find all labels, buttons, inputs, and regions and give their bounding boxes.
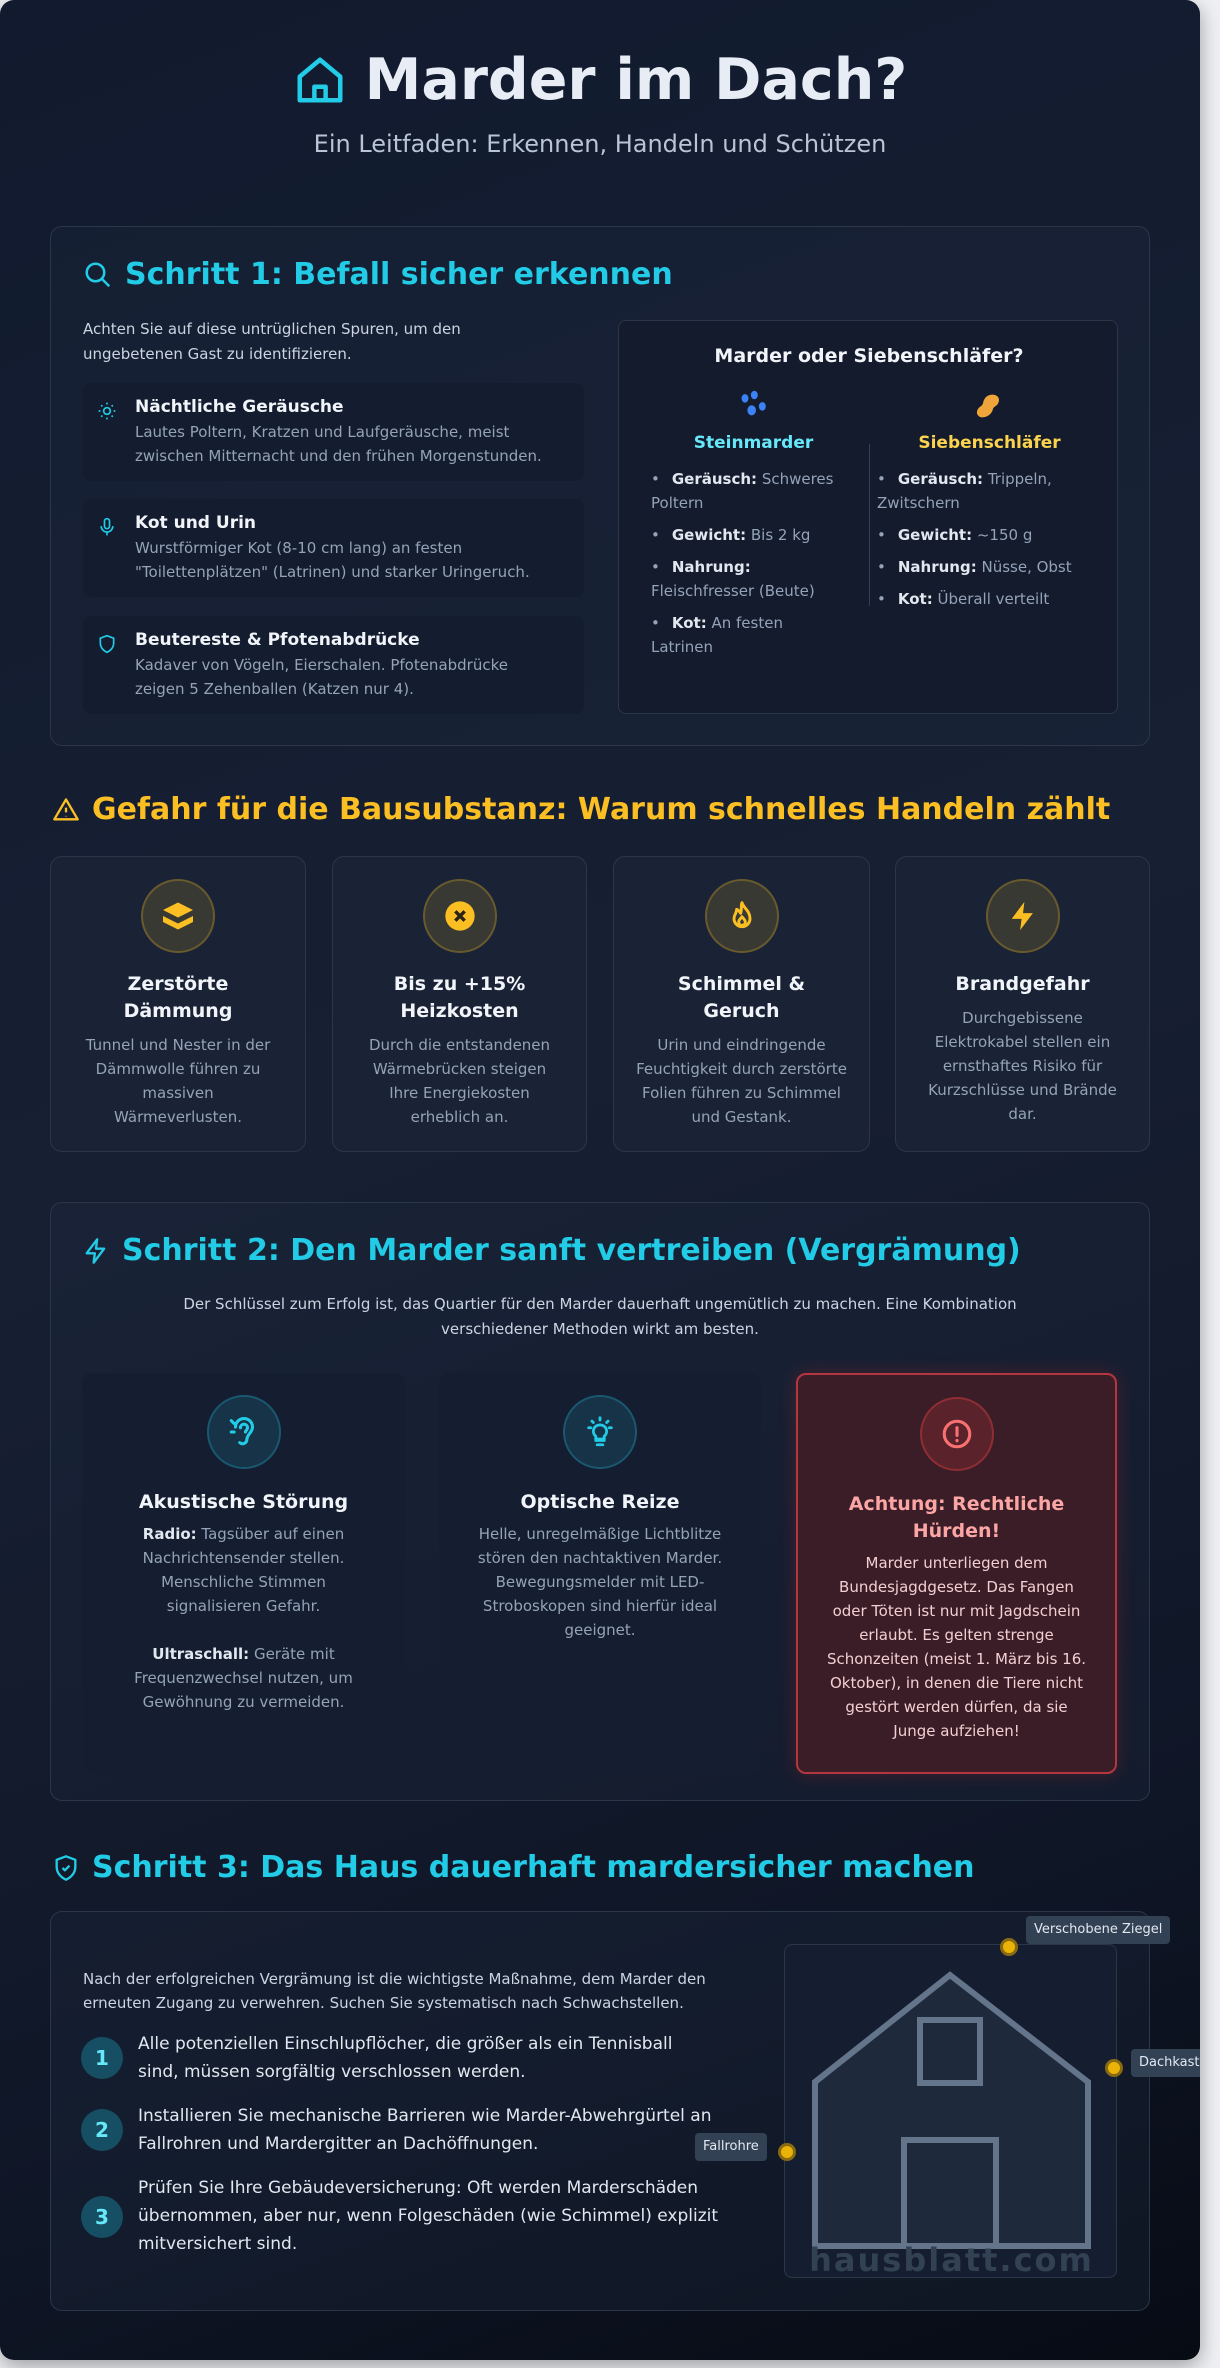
- header: [298, 47, 907, 158]
- heading step 3: Schritt 3: Das Haus dauerhaft mardersicher machen: [92, 1850, 975, 1885]
- callout: legal warning: Marder unterliegen dem Bundesjagdgesetz. Das Fangen oder Töten ist nur mit Jagdschein erlaubt. Es gelten strenge Schonzeiten (meist 1. März bis 16. Oktober), in denen die Tiere nicht gestört werden dürfen, da sie Junge aufziehen!: [827, 1554, 1086, 1740]
- card: Dämmung: Tunnel und Nester in der Dämmwolle führen zu massiven Wärmeverlusten.: [86, 1036, 270, 1126]
- method: optical: [439, 1373, 761, 1774]
- icon: peanut: [976, 394, 999, 418]
- marker: Dachkasten: [1105, 2049, 1200, 2077]
- panel: Schritt 2: [50, 1202, 1150, 1801]
- icon: flame: [704, 879, 778, 953]
- intro step 3: Nach der erfolgreichen Vergrämung ist die wichtigste Maßnahme, dem Marder den erneuten Zugang zu verwehren. Suchen Sie systematisch nach Schwachstellen.: [83, 1970, 706, 2012]
- sign: noises: Lautes Poltern, Kratzen und Laufgeräusche, meist zwischen Mitternacht und den frühen Morgenstunden.: [135, 423, 542, 465]
- marker: Verschobene Ziegel: [1000, 1916, 1170, 1956]
- step 2: Installieren Sie mechanische Barrieren wie Marder-Abwehrgürtel an Fallrohren und Mardergitter an Dachöffnungen.: [138, 2106, 712, 2154]
- callout: legal warning: Achtung: Rechtliche Hürden!: [849, 1493, 1064, 1542]
- method: optical: Optische Reize: [521, 1491, 679, 1513]
- title: Marder im Dach?: [365, 47, 907, 113]
- marker: Fallrohre: Fallrohre: [703, 2139, 759, 2154]
- card: Dämmung: [50, 856, 306, 1152]
- step 1: 1: [95, 2046, 109, 2070]
- sign: prey remains: Beutereste & Pfotenabdrücke: [135, 630, 420, 650]
- step 3: Prüfen Sie Ihre Gebäudeversicherung: Oft werden Marderschäden übernommen, aber nur, wenn Folgeschäden (wie Schimmel) explizit mitversichert sind.: [138, 2178, 718, 2254]
- marker: Verschobene Ziegel: Verschobene Ziegel: [1034, 1922, 1162, 1937]
- comparison box: Kot: Überall verteilt: [898, 590, 1049, 608]
- heading step 1: Schritt 1: Befall sicher erkennen: [125, 257, 673, 292]
- card: Dämmung: Zerstörte Dämmung: [124, 973, 232, 1022]
- icon: layers: [141, 879, 215, 953]
- callout: legal warning: [796, 1373, 1117, 1774]
- card: Brandgefahr: Brandgefahr: [955, 973, 1090, 995]
- sign: droppings: Kot und Urin: [135, 513, 256, 533]
- card: Schimmel: Schimmel & Geruch: [678, 973, 805, 1022]
- sign: droppings: [83, 499, 584, 597]
- card: Brandgefahr: [895, 856, 1150, 1152]
- card: Heizkosten: Bis zu +15% Heizkosten: [394, 973, 525, 1022]
- divider: [869, 444, 870, 606]
- sign: noises: Nächtliche Geräusche: [135, 397, 344, 417]
- step 2: 2: [95, 2118, 109, 2142]
- heading: Gefahr: Gefahr für die Bausubstanz: Warum schnelles Handeln zählt: [92, 792, 1110, 827]
- method: acoustic: [82, 1373, 405, 1774]
- card: Heizkosten: Durch die entstandenen Wärmebrücken steigen Ihre Energiekosten erheblich an.: [369, 1036, 550, 1126]
- comparison box: Kot: An festen Latrinen: [651, 614, 783, 656]
- comparison box: [618, 320, 1118, 714]
- column: Siebenschläfer: [877, 394, 1072, 608]
- icon: bulb: [563, 1395, 637, 1469]
- step 3: 3: [95, 2205, 109, 2229]
- icon: ear: [206, 1395, 280, 1469]
- sign: prey remains: Kadaver von Vögeln, Eierschalen. Pfotenabdrücke zeigen 5 Zehenballen (Katzen nur 4).: [135, 656, 508, 698]
- card: Brandgefahr: Durchgebissene Elektrokabel stellen ein ernsthaftes Risiko für Kurzschlüsse und Brände dar.: [928, 1009, 1117, 1123]
- icon: x circle: [422, 879, 496, 953]
- icon: paw: [742, 390, 766, 416]
- sign: droppings: Wurstförmiger Kot (8-10 cm lang) an festen "Toilettenplätzen" (Latrinen) und starker Uringeruch.: [135, 539, 530, 581]
- comparison box: Siebenschläfer: [918, 433, 1061, 453]
- panel: Schritt 1: [50, 226, 1150, 746]
- comparison box: Nahrung: Nüsse, Obst: [898, 558, 1072, 576]
- comparison box: Steinmarder: [694, 433, 813, 453]
- sign: noises: [83, 383, 584, 481]
- heading step 2: Schritt 2: Den Marder sanft vertreiben (Vergrämung): [122, 1233, 1021, 1268]
- marker: Fallrohre: [695, 2133, 796, 2161]
- subtitle: Ein Leitfaden: Erkennen, Handeln und Schützen: [314, 130, 886, 158]
- step 1: Alle potenziellen Einschlupflöcher, die größer als ein Tennisball sind, müssen sorgfältig verschlossen werden.: [138, 2034, 672, 2082]
- comparison box: Nahrung: Fleischfresser (Beute): [651, 558, 815, 600]
- comparison box: Geräusch: Trippeln, Zwitschern: [877, 470, 1052, 512]
- column: Steinmarder: [651, 390, 833, 656]
- sign: prey remains: [83, 616, 584, 714]
- card: Schimmel: Urin und eindringende Feuchtigkeit durch zerstörte Folien führen zu Schimmel und Gestank.: [636, 1036, 847, 1126]
- method: acoustic: Ultraschall: Geräte mit Frequenzwechsel nutzen, um Gewöhnung zu vermeiden.: [134, 1645, 353, 1711]
- icon: bolt: [986, 879, 1060, 953]
- card: Schimmel: [613, 856, 870, 1152]
- comparison box: Geräusch: Schweres Poltern: [651, 470, 833, 512]
- method: optical: Helle, unregelmäßige Lichtblitze stören den nachtaktiven Marder. Bewegungsmelder mit LED-Stroboskopen sind hierfür ideal geeignet.: [478, 1525, 722, 1639]
- intro text: Achten Sie auf diese untrüglichen Spuren, um den ungebetenen Gast zu identifizieren.: [83, 320, 461, 363]
- method: acoustic: Radio: Tagsüber auf einen Nachrichtensender stellen. Menschliche Stimmen signalisieren Gefahr.: [143, 1525, 344, 1615]
- icon: house: [298, 57, 342, 102]
- method: acoustic: Akustische Störung: [139, 1491, 348, 1513]
- card: Heizkosten: [332, 856, 587, 1152]
- watermark: hausblatt.com: [809, 2241, 1094, 2279]
- panel: Schritt 3: [50, 1911, 1150, 2311]
- intro step 2: Der Schlüssel zum Erfolg ist, das Quartier für den Marder dauerhaft ungemütlich zu machen. Eine Kombination verschiedener Methoden wirkt am besten.: [183, 1295, 1017, 1338]
- comparison box: Gewicht: Bis 2 kg: [672, 526, 810, 544]
- house illustration: [784, 1944, 1117, 2278]
- comparison title: Marder oder Siebenschläfer?: [714, 345, 1024, 367]
- comparison box: Gewicht: ~150 g: [898, 526, 1032, 544]
- icon: alert: [920, 1397, 994, 1471]
